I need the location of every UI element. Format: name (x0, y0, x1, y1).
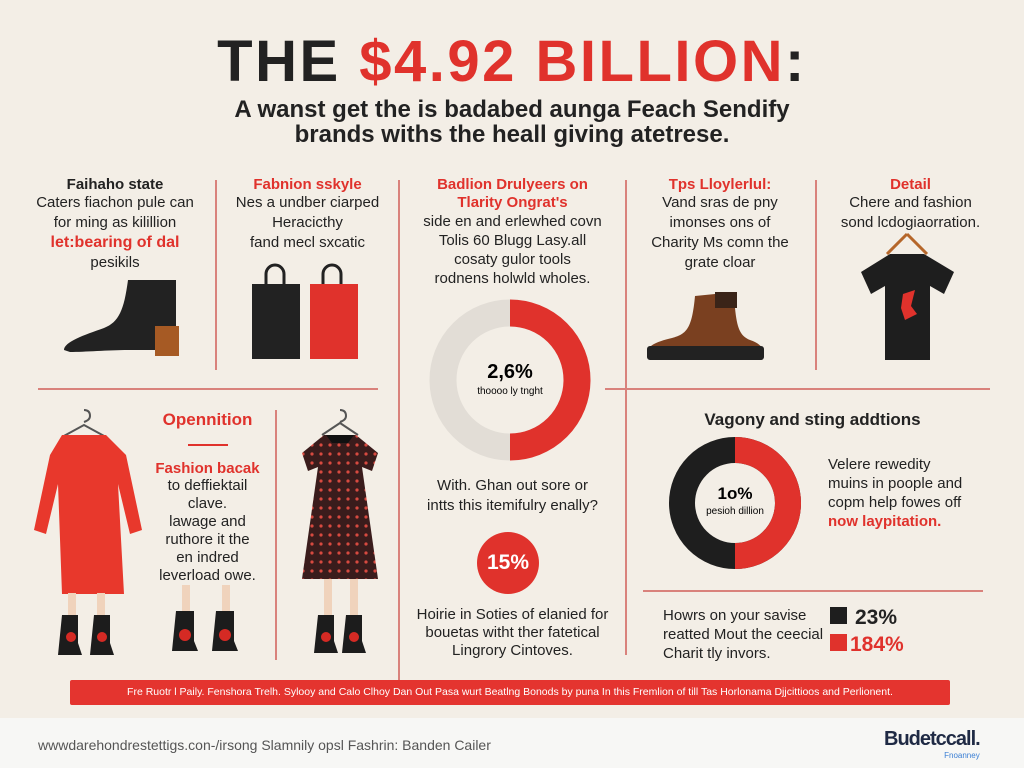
panel: center column: rodnens holwld wholes. (435, 270, 590, 287)
text: center bottom (417, 606, 608, 659)
donut chart: 2,6%: 2,6% (487, 361, 533, 383)
badge: 15%: 15% (487, 551, 529, 574)
panel: center column: Tlarity Ongrat's (457, 194, 568, 211)
panel: vagony heading: Vagony and sting addtions (704, 410, 921, 429)
panel: opennition: to deffiektail (168, 477, 247, 494)
panel: center column: Tolis 60 Blugg Lasy.all (439, 232, 586, 249)
panel: opennition: clave. (188, 495, 227, 512)
text: question: intts this itemifulry enally? (427, 497, 598, 514)
panel: fashion state (36, 176, 194, 271)
icon: red coat figure (34, 409, 142, 655)
footer (0, 718, 1024, 768)
text: vagony description: muins in poople and (828, 475, 962, 492)
text: vagony description (828, 456, 962, 530)
donut chart: 10%: pesioh dillion (706, 506, 764, 517)
panel: tips: Tps Lloylerlul: (669, 176, 771, 193)
text: hours: reatted Mout the ceecial (663, 626, 823, 643)
legend: 23% (855, 606, 897, 629)
logo (884, 728, 980, 760)
text: center bottom: bouetas witht ther fatetical (425, 624, 600, 641)
panel: fashion style (236, 176, 379, 251)
text: vagony description: copm help fowes off (828, 494, 961, 511)
text: center bottom: Lingrory Cintoves. (452, 642, 573, 659)
text: question (427, 477, 598, 514)
footer url: wwwdarehondrestettigs.con-/irsong Slamnily opsl Fashrin: Banden Cailer (38, 737, 491, 753)
text: vagony description: Velere rewedity (828, 456, 931, 473)
panel: tips: grate cloar (685, 254, 755, 271)
panel: fashion style: Heracicthy (272, 214, 343, 231)
icon: brown boot (647, 292, 764, 360)
panel: tips: imonses ons of (670, 214, 770, 231)
panel: tips: Vand sras de pny (662, 194, 778, 211)
panel: tips (651, 176, 789, 271)
donut chart: 2,6% (430, 300, 590, 460)
panel: center column: Badlion Drulyeers on (437, 176, 588, 193)
panel: opennition (155, 410, 260, 584)
panel: fashion state: let:bearing of dal (51, 234, 179, 251)
icon: ankle boot (64, 280, 179, 356)
panel: center column: side en and erlewhed covn (423, 213, 602, 230)
panel: opennition: Opennition (163, 410, 252, 429)
donut chart: 10%: 1o% (718, 484, 752, 503)
panel: opennition: lawage and (169, 513, 246, 530)
panel: fashion state: Faihaho state (67, 176, 163, 193)
panel: opennition: Fashion bacak (155, 460, 260, 477)
panel: detail: sond lcdogiaorration. (841, 214, 980, 231)
text: center bottom: Hoirie in Soties of elanied for (417, 606, 608, 623)
icon: middle legs (172, 585, 238, 651)
panel: opennition: leverload owe. (159, 567, 256, 584)
text: question: With. Ghan out sore or (437, 477, 588, 494)
text: vagony description: now laypitation. (828, 513, 941, 530)
panel: detail (841, 176, 980, 231)
badge: 15% (477, 532, 539, 594)
panel: detail: Chere and fashion (849, 194, 972, 211)
subtitle (234, 96, 790, 148)
panel: fashion state: for ming as kilillion (54, 214, 176, 231)
donut chart: 10% (669, 437, 801, 569)
panel: fashion style: fand mecl sxcatic (250, 234, 365, 251)
panel: center column: cosaty gulor tools (454, 251, 571, 268)
panel: fashion style: Nes a undber ciarped (236, 194, 379, 211)
title: THE $4.92 BILLION: (217, 29, 807, 94)
banner (70, 680, 950, 705)
icon: shopping bags (252, 264, 358, 359)
panel: center column (423, 176, 602, 287)
donut chart: 2,6%: thoooo ly tnght (477, 386, 543, 397)
icon: t-shirt (861, 233, 954, 360)
subtitle: A wanst get the is badabed aunga Feach Sendify (234, 96, 790, 123)
icon: polka dot dress (302, 409, 378, 653)
legend (830, 606, 904, 656)
panel: detail: Detail (890, 176, 931, 193)
panel: opennition: en indred (176, 549, 239, 566)
logo: Budetccall. (884, 728, 980, 750)
text: hours: Charit tly invors. (663, 645, 771, 662)
panel: fashion style: Fabnion sskyle (253, 176, 362, 193)
panel: tips: Charity Ms comn the (651, 234, 789, 251)
panel: fashion state: Caters fiachon pule can (36, 194, 194, 211)
banner: Fre Ruotr l Paily. Fenshora Trelh. Sylooy and Calo Clhoy Dan Out Pasa wurt Beatlng Bonods by puna In this Fremlion of till Tas Horlonama Djjcittioos and Perlionent. (127, 686, 893, 698)
panel: fashion state: pesikils (90, 254, 140, 271)
logo: Fnoanney (944, 751, 980, 760)
text: hours: Howrs on your savise (663, 607, 806, 624)
text: hours (663, 607, 823, 662)
panel: opennition: ruthore it the (165, 531, 250, 548)
subtitle: brands withs the heall giving atetrese. (295, 121, 729, 148)
legend: 184% (850, 633, 904, 656)
